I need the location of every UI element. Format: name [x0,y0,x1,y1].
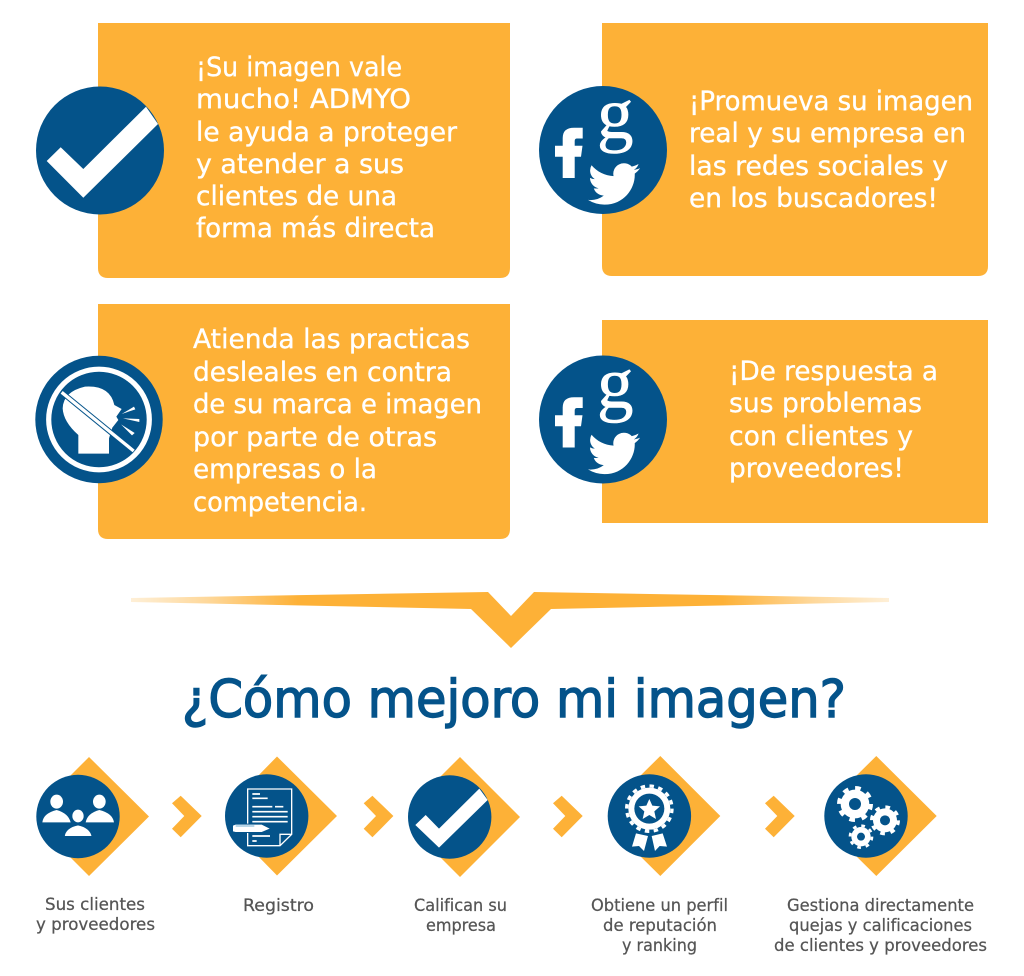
text: atienda las practicas: por parte de otras [193,422,437,453]
step 1: clients [36,757,155,935]
step 3: califican [408,757,520,936]
arrow: chevron 2 [364,796,393,837]
text: atienda las practicas: Atienda las practicas [193,324,470,355]
label [774,896,987,956]
arrow: chevron 1 [172,796,202,837]
label: quejas y calificaciones [789,916,972,936]
step 2: registro [225,756,337,916]
text: su imagen vale mucho: y atender a sus [196,149,404,180]
text: su imagen vale mucho [196,52,458,244]
text: promueva su imagen [689,86,973,214]
icon: gears [839,788,898,848]
label: de clientes y proveedores [774,936,987,956]
label: de reputación [603,916,717,936]
panel: redes sociales [602,23,988,276]
icon: social networks circle 2 [539,342,667,484]
text: atienda las practicas: empresas o la [193,454,377,485]
icon: social networks circle [539,73,667,214]
label: Registro [243,896,314,916]
icon: check circle [36,86,164,214]
label: y proveedores [36,915,155,935]
text: promueva su imagen: las redes sociales y [689,151,948,182]
text: su imagen vale mucho: forma más directa [196,213,435,244]
label [414,896,507,936]
text: promueva su imagen: ¡Promueva su imagen [689,86,973,117]
label: y ranking [622,936,697,956]
text: atienda las practicas [193,324,482,518]
icon: document and pen [232,789,292,846]
text: su imagen vale mucho: clientes de una [196,181,397,212]
arrow: chevron 4 [765,796,795,837]
text: su imagen vale mucho: mucho! ADMYO [196,84,411,115]
icon: social networks circle 2: g [597,342,634,424]
label: Califican su [414,896,507,916]
text: atienda las practicas: de su marca e imagen [193,389,482,420]
text: atienda las practicas: desleales en contra [193,357,452,388]
label: Obtiene un perfil [591,896,728,916]
icon: medal [627,786,672,851]
label: Gestiona directamente [787,896,974,916]
text: de respuesta a sus problemas [729,356,938,484]
text: de respuesta a sus problemas: proveedores! [729,453,904,484]
label [36,895,155,935]
icon: no speaking circle [35,356,163,483]
arrow: divider ribbon [131,592,889,648]
arrow: chevron 3 [553,796,583,837]
label: empresa [426,916,496,936]
icon: check [415,789,488,848]
text: de respuesta a sus problemas: sus problemas [729,388,922,419]
text: de respuesta a sus problemas: ¡De respuesta a [729,356,938,387]
text: su imagen vale mucho: ¡Su imagen vale [196,52,402,83]
icon: people [42,795,114,837]
text: de respuesta a sus problemas: con clientes y [729,421,913,452]
panel: practicas desleales [98,304,510,539]
label [591,896,728,956]
heading: ¿Cómo mejoro mi imagen? [182,670,846,730]
label: Sus clientes [45,895,145,915]
text: promueva su imagen: real y su empresa en [689,118,966,149]
text: promueva su imagen: en los buscadores! [689,183,938,214]
step 5: gestiona [774,756,987,956]
panel: proteger imagen [98,23,510,278]
step 4: perfil [591,756,728,956]
icon: social networks circle: g [597,73,634,154]
panel: de respuesta [602,320,988,523]
text: su imagen vale mucho: le ayuda a proteger [196,117,458,148]
text: atienda las practicas: competencia. [193,487,367,518]
